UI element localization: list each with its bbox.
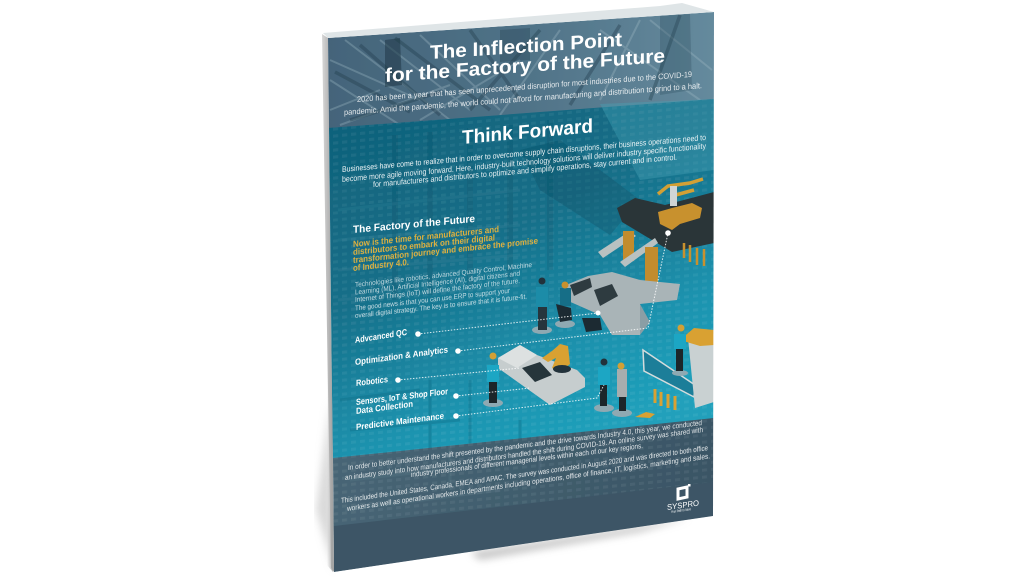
panel: teal body — [328, 99, 714, 460]
survey text: industry professionals of different managerial levels within each of our key regions. — [411, 441, 643, 479]
intro paragraph: pandemic. Amid the pandemic, the world could not afford for manufacturing and distribution to grind to a halt. — [344, 81, 702, 117]
panel: dark footer — [333, 418, 714, 572]
body text — [355, 262, 532, 320]
yellow callout: transformation journey and embrace the promise — [353, 236, 538, 265]
callout labels: Optimization & Analytics — [355, 344, 448, 367]
page edge strip — [323, 3, 714, 38]
illustration: inspection machine with robot — [483, 344, 585, 407]
body text: Internet of Things (IoT) will define the factory of the future. — [355, 278, 520, 304]
logo: SYSPRO: Your Path to More — [671, 507, 691, 514]
panel: header background — [328, 12, 714, 130]
think forward paragraph: Businesses have come to realize that in order to overcome supply chain disruptions, their business operations need to — [342, 133, 706, 174]
survey text: an industry study into how manufacturers and distributors handled the shift during COVID-19. An online survey was shared with — [345, 425, 703, 482]
book spine — [322, 34, 334, 572]
title — [385, 33, 664, 82]
logo: SYSPRO: SYSPRO — [667, 499, 699, 512]
survey text: In order to better understand the shift presented by the pandemic and the drive towards Industry 4.0, this year, we conducted — [348, 418, 702, 472]
page shadow — [470, 518, 690, 560]
illustration: two people talking — [594, 358, 632, 417]
title: The Inflection Point — [430, 29, 623, 64]
illustration: operators and chairs — [532, 278, 602, 334]
body text: Technologies like robotics, advanced Quality Control, Machine — [355, 262, 532, 289]
illustration: upper robot cell — [566, 179, 714, 335]
title: for the Factory of the Future — [385, 45, 665, 87]
connector lines — [398, 233, 668, 416]
heading: Think Forward: Think Forward — [462, 115, 593, 149]
illustration: glass cage station — [635, 324, 714, 418]
book page — [328, 12, 714, 572]
yellow callout: of Industry 4.0. — [353, 257, 409, 273]
callout labels: Advcanced QC — [355, 327, 407, 345]
body text: The good news is that you can use ERP to support your — [355, 288, 511, 312]
logo: SYSPRO — [667, 484, 699, 514]
callout labels — [355, 327, 448, 432]
heading: factory of the future: The Factory of the Future — [353, 213, 475, 236]
callout labels: Data Collection — [356, 399, 413, 416]
left shadow — [327, 300, 333, 572]
survey text: workers as well as operational workers in departments including operations, office of finance, IT, logistics, marketing and sales. — [346, 451, 710, 513]
callout labels: Sensors, IoT & Shop Floor — [356, 386, 448, 407]
think forward paragraph: become more agile moving forward. Here, industry-built technology solutions will deliver industry specific functionality — [342, 142, 706, 184]
callout labels: Robotics — [356, 374, 388, 388]
connector dots — [395, 230, 671, 419]
yellow callout: Now is the time for manufacturers and — [353, 224, 499, 249]
yellow callout — [353, 224, 538, 273]
body text: overall digital strategy. The key is to ensure that it is future-fit. — [355, 294, 527, 320]
yellow callout: distributors to embark on their digital — [353, 232, 495, 257]
survey text: This included the United States, Canada, EMEA and APAC. The survey was conducted in August 2020 and was directed to both office — [341, 443, 708, 505]
think forward paragraph: for manufacturers and distributors to optimize and simplify operations, stay current and in control. — [373, 153, 677, 189]
survey text — [341, 418, 710, 513]
body text: Learning (ML), Artificial Intelligence (AI), digital citizens and — [355, 271, 520, 296]
intro paragraph: 2020 has been a year that has seen unprecedented disruption for most industries due to the COVID-19 — [357, 70, 693, 104]
callout labels: Predictive Maintenance — [356, 411, 444, 432]
